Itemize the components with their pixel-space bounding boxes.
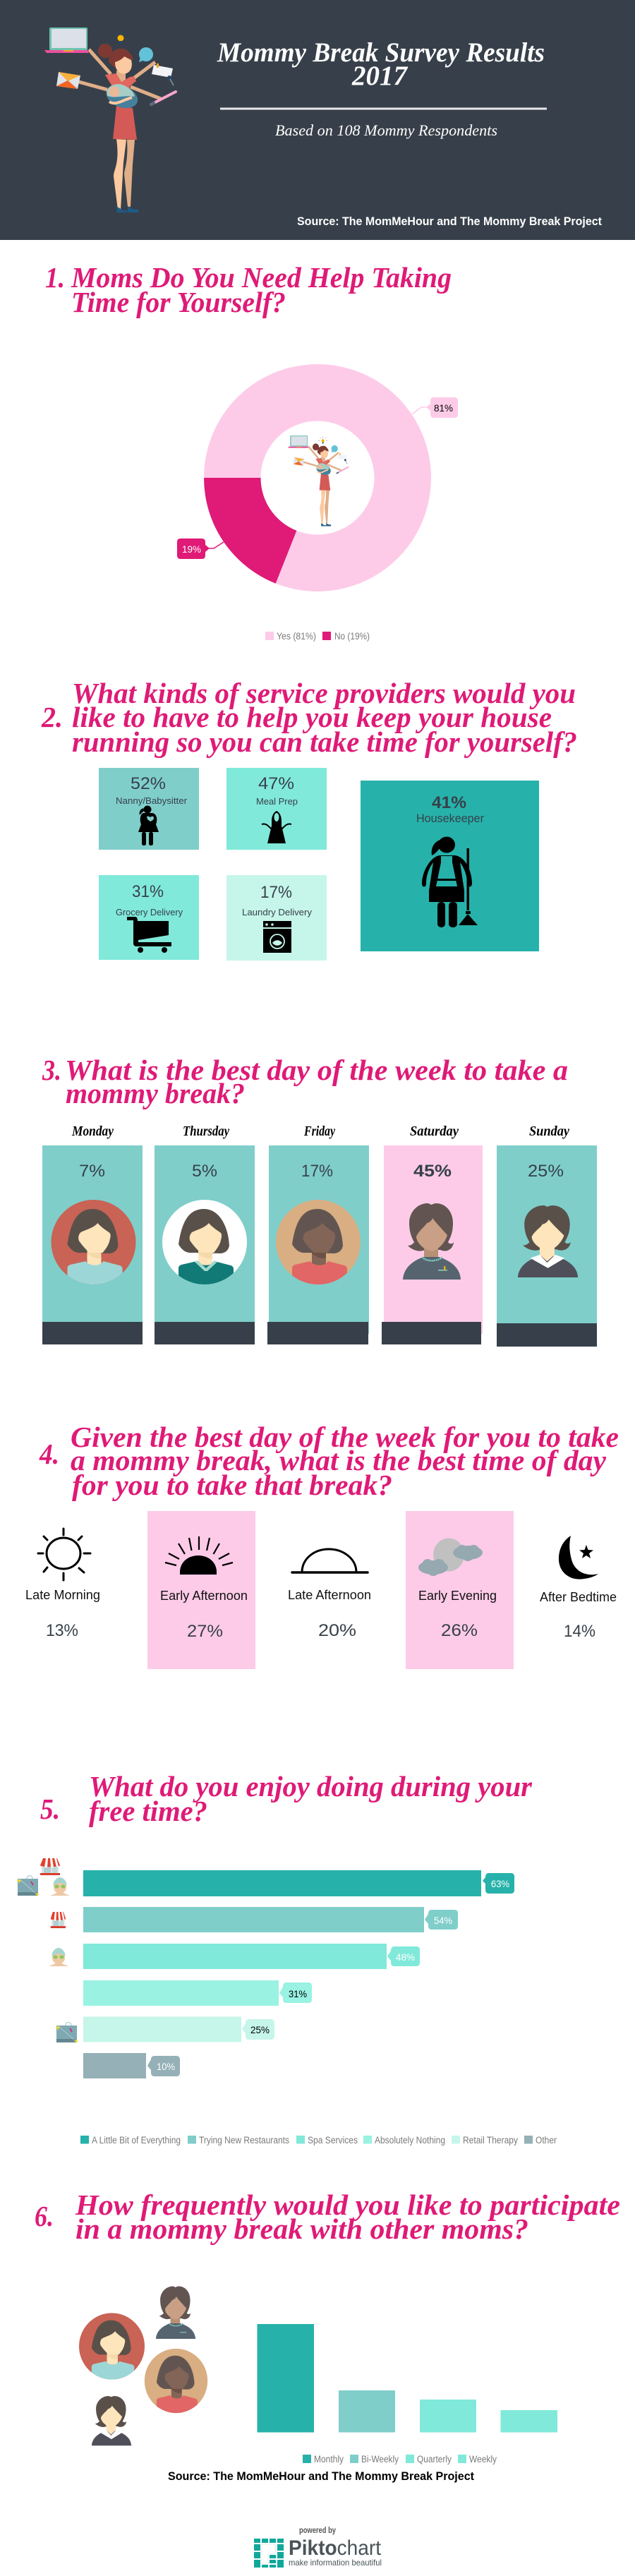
section 2 heading: What kinds of service providers would you [72, 677, 576, 709]
icon: restaurant [51, 1912, 66, 1928]
card: housekeeper [361, 781, 539, 951]
card: meal prep [226, 768, 327, 850]
bar 48% [83, 1944, 420, 1969]
card: nanny: 52% [131, 774, 166, 793]
card: housekeeper: Housekeeper [416, 812, 484, 825]
avatar: Monday [51, 1200, 135, 1284]
legend: free time: A Little Bit of Everything [92, 2135, 181, 2145]
icon: rising sun [165, 1536, 233, 1575]
bar 10%: 10% [157, 2061, 175, 2072]
column: Saturday [382, 1124, 483, 1344]
section 4 heading [39, 1421, 619, 1501]
icon: nanny [138, 806, 159, 845]
section 3 heading: What is the best day of the week to take a [65, 1054, 568, 1086]
legend: free time [80, 2135, 557, 2145]
icon: spa [49, 1948, 68, 1966]
card: grocery delivery: Grocery Delivery [116, 907, 183, 917]
card: housekeeper: 41% [432, 793, 466, 812]
avatar: Saturday [403, 1203, 461, 1280]
avatar: Thursday [162, 1200, 247, 1284]
card: grocery delivery [99, 875, 199, 960]
header panel [0, 0, 635, 240]
column: Monday: 7% [79, 1162, 105, 1181]
bar 10% [83, 2053, 180, 2078]
card: laundry delivery [226, 875, 327, 961]
section 1 heading [45, 261, 452, 318]
column: Monday: Monday [71, 1124, 114, 1139]
time: early evening: 26% [441, 1621, 478, 1640]
section 2 heading: like to have to help you keep your house [72, 701, 552, 733]
icon: sun [38, 1529, 90, 1580]
avatar: Sunday [518, 1205, 578, 1277]
legend: frequency: Weekly [469, 2454, 497, 2464]
callout 81%: 81% [434, 402, 453, 414]
avatar: mom right [145, 2349, 207, 2413]
donut legend: No (19%) [334, 631, 370, 642]
bar 54%: 54% [434, 1915, 452, 1926]
legend: frequency: Bi-Weekly [361, 2454, 399, 2464]
column: Friday [267, 1124, 369, 1344]
subtitle: Based on 108 Mommy Respondents [275, 121, 497, 139]
title [217, 37, 545, 91]
section 6 heading: 6. [35, 2200, 54, 2232]
powered by label: powered by [299, 2525, 336, 2535]
time: after bedtime: 14% [564, 1622, 595, 1641]
column: Saturday: Saturday [410, 1124, 459, 1139]
time: late afternoon: Late Afternoon [288, 1588, 371, 1602]
icon: cart [127, 917, 171, 953]
legend: frequency: Monthly [314, 2454, 344, 2464]
legend: free time: Other [536, 2135, 557, 2145]
bar 31% [83, 1980, 312, 2006]
title: Mommy Break Survey Results [217, 37, 545, 68]
column: Thursday: 5% [192, 1162, 217, 1181]
section 3 heading: 3. [42, 1054, 61, 1086]
time: early evening: Early Evening [418, 1589, 497, 1603]
section 4 heading: Given the best day of the week for you to take [71, 1421, 619, 1453]
icon: crescent moon and star [559, 1536, 598, 1579]
bar 63% [83, 1870, 514, 1896]
section 5 heading [40, 1770, 533, 1827]
section 4 heading: 4. [39, 1438, 59, 1470]
icon: moon behind clouds [418, 1539, 483, 1576]
section 6 heading: How frequently would you like to participate [75, 2189, 620, 2221]
Piktochart wordmark: Piktochart [289, 2536, 382, 2560]
column: Thursday [155, 1124, 255, 1344]
donut centre illustration [288, 435, 349, 526]
source line: Source: The MomMeHour and The Mommy Break Project [168, 2469, 474, 2483]
time: after bedtime: After Bedtime [540, 1590, 617, 1604]
column: Sunday: 25% [528, 1162, 564, 1181]
icons: a little bit of everything [16, 1858, 70, 1896]
avatar: Friday [276, 1200, 361, 1284]
section 4 heading: a mommy break, what is the best time of day [71, 1444, 607, 1476]
icon: apron [262, 811, 291, 843]
donut legend [265, 631, 370, 642]
donut legend: Yes (81%) [277, 631, 316, 642]
section 3 heading: mommy break? [66, 1077, 245, 1109]
Piktochart wordmark: make information beautiful [289, 2558, 382, 2568]
time: early evening [406, 1511, 514, 1669]
avatar: mom bottom [92, 2396, 131, 2445]
time: early afternoon [147, 1511, 255, 1669]
time: early afternoon: 27% [187, 1622, 223, 1641]
bar 25%: 25% [250, 2024, 270, 2035]
legend: free time: Retail Therapy [463, 2135, 518, 2145]
callout 19%: 19% [182, 543, 201, 555]
time: late morning: 13% [46, 1621, 78, 1640]
section 1 heading: Moms Do You Need Help Taking [71, 261, 452, 294]
avatar: mom top [156, 2287, 195, 2339]
section 6 heading: in a mommy break with other moms? [75, 2213, 528, 2245]
card: nanny: Nanny/Babysitter [116, 795, 188, 806]
column: Saturday: 45% [413, 1162, 452, 1181]
time: early afternoon: Early Afternoon [160, 1589, 248, 1603]
avatar: mom left [79, 2313, 145, 2380]
bar 54% [83, 1907, 458, 1932]
section 5 heading: 5. [40, 1793, 60, 1825]
icon: setting sun [292, 1549, 368, 1572]
icon: washing machine [263, 921, 291, 953]
icon: shopping bag [55, 2023, 78, 2043]
legend: free time: Trying New Restaurants [199, 2135, 289, 2145]
bar 48%: 48% [396, 1951, 415, 1963]
section 1 heading: 1. [45, 261, 65, 294]
section 1 heading: Time for Yourself? [71, 286, 286, 318]
bar 25% [83, 2017, 274, 2042]
legend: frequency [303, 2454, 497, 2464]
donut chart [177, 364, 458, 591]
column: Friday: Friday [303, 1124, 335, 1139]
icon: Piktochart logo [254, 2539, 284, 2568]
card: meal prep: 47% [258, 774, 294, 793]
card: laundry delivery: 17% [260, 883, 292, 902]
legend: free time: Spa Services [308, 2135, 358, 2145]
card: meal prep: Meal Prep [256, 796, 298, 807]
bar chart: free time [83, 1870, 514, 2078]
section 2 heading: 2. [41, 701, 63, 733]
section 4 heading: for you to take that break? [72, 1469, 392, 1501]
time: late afternoon: 20% [318, 1621, 356, 1640]
time: late morning [25, 1529, 100, 1640]
column: Monday [42, 1124, 143, 1344]
bar 31%: 31% [289, 1988, 307, 1999]
illustration: group of moms [79, 2287, 207, 2445]
time: after bedtime [540, 1536, 617, 1641]
callout 81% [412, 397, 458, 418]
column: Thursday: Thursday [183, 1124, 229, 1139]
section 2 heading [41, 677, 577, 758]
source line: Source: The MomMeHour and The Mommy Break Project [297, 215, 602, 228]
section 2 heading: running so you can take time for yourself? [72, 726, 577, 758]
time: late morning: Late Morning [25, 1588, 100, 1602]
legend: free time: Absolutely Nothing [375, 2135, 445, 2145]
column: Friday: 17% [301, 1162, 333, 1181]
icon: housekeeper [422, 837, 478, 927]
section 5 heading: free time? [89, 1795, 207, 1827]
bar 63%: 63% [491, 1878, 509, 1889]
bar chart: frequency [257, 2324, 557, 2432]
column: Sunday: Sunday [529, 1124, 569, 1139]
illustration: multitasking mom [44, 28, 176, 212]
legend: frequency: Quarterly [417, 2454, 452, 2464]
title: 2017 [351, 61, 408, 91]
section 3 heading [42, 1054, 568, 1109]
card: grocery delivery: 31% [132, 882, 164, 901]
card: nanny [99, 768, 199, 850]
section 6 heading [35, 2189, 620, 2245]
section 5 heading: What do you enjoy doing during your [89, 1770, 533, 1802]
card: laundry delivery: Laundry Delivery [242, 907, 313, 917]
time: late afternoon [288, 1549, 371, 1640]
column: Sunday [497, 1124, 597, 1347]
callout 19% [177, 538, 224, 559]
